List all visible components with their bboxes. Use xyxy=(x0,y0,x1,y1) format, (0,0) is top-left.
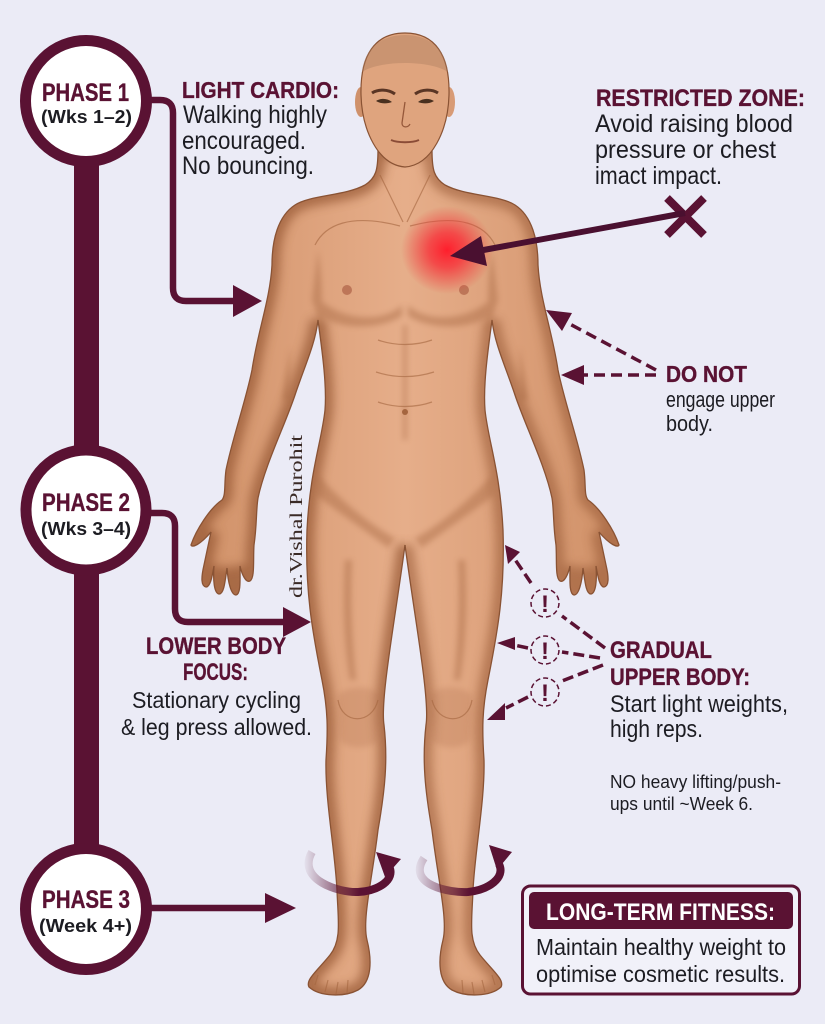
dashed arrows: gradual upper body xyxy=(487,545,605,720)
phase 3 badge: (Week 4+) xyxy=(39,916,132,936)
text block: lower body focus: & leg press allowed. xyxy=(121,714,312,740)
phase 1 badge xyxy=(26,40,146,162)
text block: gradual upper body: UPPER BODY: xyxy=(610,664,750,691)
warning icon 3 xyxy=(531,678,559,707)
panel: long-term fitness: optimise cosmetic results. xyxy=(536,961,785,987)
text block: restricted zone: Avoid raising blood xyxy=(595,110,793,138)
anatomical figure xyxy=(191,33,619,995)
arrow: restricted zone to chest xyxy=(450,213,685,266)
text block: restricted zone xyxy=(595,85,805,190)
restricted zone glow xyxy=(401,206,493,294)
warning icon 3: ! xyxy=(541,680,549,707)
panel: long-term fitness: LONG-TERM FITNESS: xyxy=(546,899,775,926)
text block: gradual upper body: GRADUAL xyxy=(610,637,712,664)
connector arrow: phase 3 xyxy=(150,893,296,923)
connector arrow: phase 2 xyxy=(150,513,311,637)
text block: light cardio: No bouncing. xyxy=(182,152,314,180)
phase 2 badge xyxy=(26,450,146,570)
text block: do not: engage upper xyxy=(666,387,775,412)
text block: gradual upper body: ups until ~Week 6. xyxy=(610,794,753,814)
text block: lower body focus: FOCUS: xyxy=(183,659,248,686)
panel header xyxy=(529,892,793,929)
phase 3 badge xyxy=(26,848,146,970)
watermark: dr.Vishal Purohit xyxy=(286,435,306,598)
panel: long-term fitness: Maintain healthy weight to xyxy=(536,934,786,960)
text block: restricted zone: pressure or chest xyxy=(595,136,776,164)
text block: do not xyxy=(666,361,775,436)
warning icon 1: ! xyxy=(541,591,549,618)
text block: lower body focus: Stationary cycling xyxy=(132,687,301,713)
text block: light cardio: LIGHT CARDIO: xyxy=(182,77,339,103)
rotation arrow: left ankle xyxy=(309,852,401,892)
dashed arrows: do not xyxy=(546,310,656,385)
connector arrow: phase 1 xyxy=(150,100,262,317)
phase 3 badge: PHASE 3 xyxy=(42,886,130,914)
text block: gradual upper body: high reps. xyxy=(610,716,703,743)
text block: restricted zone: imact impact. xyxy=(595,162,722,190)
text block: light cardio: Walking highly xyxy=(183,101,327,129)
phase 2 badge: PHASE 2 xyxy=(42,489,130,517)
text block: gradual upper body: Start light weights, xyxy=(610,691,788,718)
warning icon 2 xyxy=(531,636,559,665)
icon: restricted cross xyxy=(667,198,704,235)
text block: light cardio xyxy=(182,77,339,180)
text block: restricted zone: RESTRICTED ZONE: xyxy=(596,85,805,112)
rotation arrow: right ankle xyxy=(420,845,512,892)
phase 1 badge: (Wks 1–2) xyxy=(41,107,132,127)
text block: gradual upper body: NO heavy lifting/push- xyxy=(610,772,781,792)
text block: light cardio: encouraged. xyxy=(182,127,306,155)
text block: do not: body. xyxy=(666,411,713,436)
head xyxy=(355,33,455,167)
text block: lower body focus: LOWER BODY xyxy=(146,633,286,660)
text block: do not: DO NOT xyxy=(666,361,747,387)
panel: long-term fitness xyxy=(522,886,800,994)
warning icon 2: ! xyxy=(541,638,549,665)
phase 1 badge: PHASE 1 xyxy=(42,79,129,107)
chest markers xyxy=(342,285,352,295)
text block: gradual upper body xyxy=(610,637,788,814)
text block: lower body focus xyxy=(121,633,312,740)
phase 2 badge: (Wks 3–4) xyxy=(41,519,131,539)
timeline bar xyxy=(74,160,99,850)
warning icon 1 xyxy=(531,589,559,618)
